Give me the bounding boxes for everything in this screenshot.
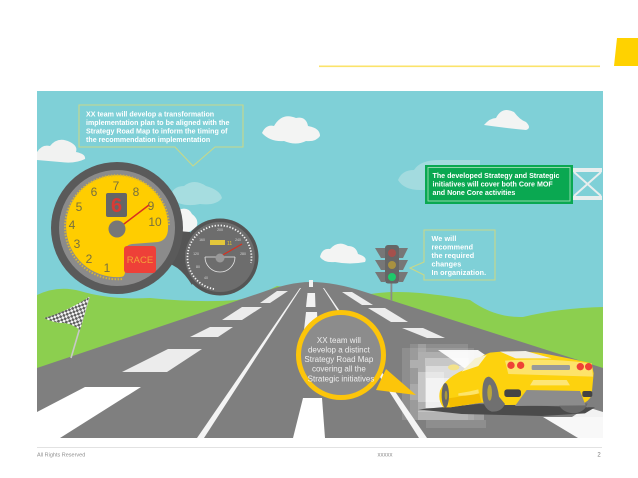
car shadow bbox=[418, 404, 595, 416]
dial numbers: 7 bbox=[113, 179, 120, 193]
hub bbox=[108, 220, 126, 238]
callout ring bbox=[298, 312, 384, 398]
circular callout: distinct road map bbox=[298, 312, 416, 398]
callout text: implementation plan to be aligned with the bbox=[86, 119, 230, 127]
road markings: left dashes bbox=[37, 291, 288, 438]
inner arc bbox=[205, 257, 235, 272]
callout text: Strategy Road Map bbox=[304, 355, 374, 364]
car side window bbox=[462, 355, 487, 372]
dial numbers: 4 bbox=[69, 218, 76, 232]
header accent line bbox=[319, 66, 600, 67]
car rear window bbox=[500, 351, 552, 358]
dial numbers: 3 bbox=[74, 237, 81, 251]
tachometer cluster bbox=[51, 162, 258, 296]
main gauge bbox=[51, 162, 183, 294]
callout text: In organization. bbox=[432, 268, 486, 277]
green hills bbox=[37, 286, 603, 368]
road markings: centre dashes bbox=[293, 280, 325, 438]
speed labels: 200 bbox=[217, 228, 223, 232]
dial numbers: 1 bbox=[104, 261, 111, 275]
sign text: initiatives will cover both Core MOF bbox=[432, 180, 553, 188]
small gauge rim bbox=[182, 218, 258, 296]
flag pole bbox=[71, 297, 89, 358]
callout text: Strategy Road Map to inform the timing of bbox=[86, 128, 228, 136]
dial numbers: 2 bbox=[86, 252, 93, 266]
callout text: We will bbox=[432, 234, 456, 243]
speed labels: 80 bbox=[196, 265, 200, 269]
cloud: top centre bbox=[262, 116, 320, 144]
green lamp bbox=[388, 273, 396, 281]
callout tail bbox=[376, 369, 416, 395]
callout: transformation plan bbox=[79, 105, 243, 166]
gauge inner ring bbox=[59, 170, 175, 286]
car diffuser bbox=[515, 390, 586, 406]
race button: RACE bbox=[127, 255, 153, 266]
car flank highlight bbox=[458, 389, 479, 396]
dial numbers: 5 bbox=[76, 200, 83, 214]
traffic light bbox=[375, 245, 408, 301]
drift smoke bbox=[402, 344, 486, 428]
red lamp bbox=[388, 249, 396, 257]
speed labels: 280 bbox=[240, 252, 246, 256]
car exhausts bbox=[504, 389, 521, 397]
car body bbox=[439, 351, 594, 407]
needle bbox=[120, 205, 149, 227]
cloud: top right bbox=[484, 110, 529, 130]
callout text: XX team will bbox=[317, 336, 361, 345]
callout text: XX team will develop a transformation bbox=[86, 110, 214, 118]
front wheel bbox=[442, 383, 449, 408]
gantry bbox=[573, 170, 602, 198]
callout: recommend changes bbox=[410, 230, 495, 280]
small gauge bbox=[182, 218, 258, 296]
car mirror bbox=[448, 364, 459, 370]
yellow dial bbox=[66, 175, 168, 277]
gauge rim bbox=[51, 162, 183, 294]
road surface bbox=[37, 282, 603, 438]
sky bbox=[37, 91, 603, 317]
road markings: solid lines bbox=[197, 288, 301, 438]
car vent bar bbox=[532, 365, 570, 370]
sign text: The developed Strategy and Strategic bbox=[432, 172, 559, 180]
sign board bbox=[425, 165, 573, 204]
speed labels: 40 bbox=[204, 276, 208, 280]
flag cloth bbox=[44, 297, 89, 330]
footer: rights: All Rights Reserved bbox=[37, 452, 85, 458]
right rear wheel bbox=[559, 403, 588, 413]
race car bbox=[418, 351, 595, 416]
callout text: recommend bbox=[432, 242, 473, 252]
callout outline bbox=[410, 230, 495, 280]
amber lamp bbox=[388, 261, 396, 269]
signal pole bbox=[390, 283, 392, 301]
footer rule bbox=[37, 447, 602, 448]
sign inner border bbox=[428, 168, 570, 201]
callout text: develop a distinct bbox=[308, 346, 371, 354]
small hub bbox=[216, 254, 224, 262]
cloud: centre bbox=[320, 244, 366, 264]
car lower lip bbox=[530, 380, 570, 385]
callout text: changes bbox=[432, 260, 461, 268]
car flank shade bbox=[448, 390, 482, 407]
dial numbers: 6 bbox=[91, 185, 98, 199]
speed tick ring bbox=[187, 225, 251, 289]
small needle bbox=[221, 244, 242, 256]
road markings: right dashes bbox=[342, 292, 485, 368]
speed labels: 160 bbox=[199, 238, 205, 242]
white road patch, lower right bbox=[543, 417, 603, 438]
dial tick ring bbox=[65, 175, 169, 279]
callout outline bbox=[79, 105, 243, 166]
footer: centre mark: xxxxx bbox=[378, 452, 392, 458]
cloud: faint behind sign bbox=[398, 160, 480, 190]
car tail lights bbox=[507, 362, 592, 370]
speed labels: 120 bbox=[193, 252, 199, 256]
footer: page number: 2 bbox=[597, 452, 601, 458]
road scene illustration bbox=[37, 91, 603, 438]
corner tab bbox=[614, 38, 638, 66]
rear panel shade bbox=[505, 359, 593, 377]
cloud: white behind small gauge bbox=[180, 208, 198, 232]
white stripe behind the car bbox=[572, 407, 603, 417]
dial numbers: 10 bbox=[148, 215, 162, 229]
sign text: and None Core activities bbox=[432, 189, 515, 197]
rear-left wheel bbox=[482, 377, 505, 412]
callout text: the recommendation implementation bbox=[86, 136, 210, 144]
callout text: the required bbox=[432, 251, 474, 260]
cluster neck bbox=[160, 225, 200, 285]
dial numbers: 8 bbox=[133, 185, 140, 199]
signal body bbox=[385, 245, 399, 284]
callout text: Strategic initiatives bbox=[308, 374, 374, 384]
cloud: upper left bbox=[37, 140, 85, 163]
cloud: faint behind gauge bbox=[170, 182, 222, 205]
digital display: 11 bbox=[227, 241, 232, 247]
checkered flag bbox=[44, 297, 89, 358]
gear indicator: 6 bbox=[111, 195, 122, 217]
speed labels bbox=[193, 228, 246, 280]
signal wings bbox=[375, 248, 408, 282]
dial numbers bbox=[69, 179, 162, 275]
dial numbers: 9 bbox=[148, 199, 155, 213]
road sign bbox=[425, 165, 573, 204]
callout text: covering all the bbox=[312, 364, 366, 374]
speed labels: 240 bbox=[235, 238, 241, 242]
